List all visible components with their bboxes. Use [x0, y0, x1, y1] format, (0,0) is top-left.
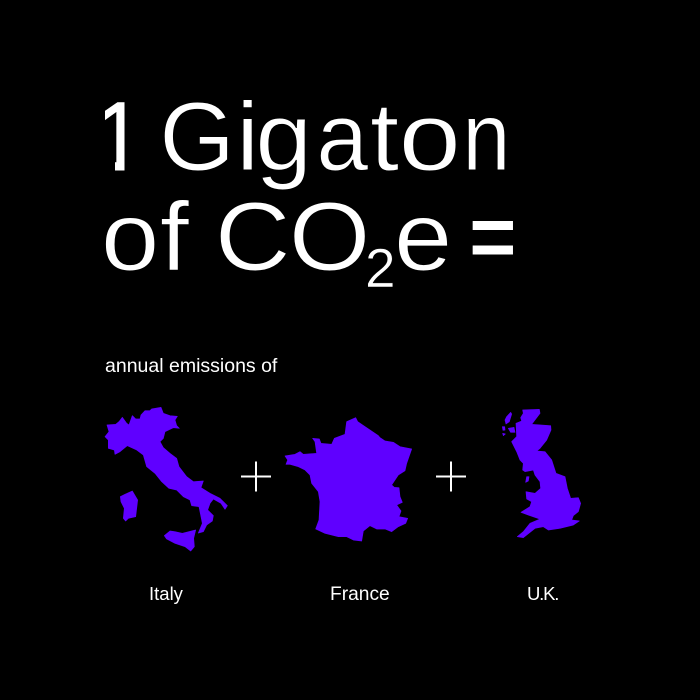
title: n: [462, 83, 510, 191]
label: France: France: [330, 584, 390, 605]
title: o: [399, 83, 461, 191]
plus sign between Italy and France: [241, 462, 271, 492]
title: G: [159, 82, 235, 191]
title: g: [255, 83, 312, 191]
title: [105, 100, 513, 287]
label: Italy: Italy: [149, 583, 184, 604]
subtitle: annual emissions of: annual emissions of: [105, 355, 278, 377]
title: a: [316, 83, 368, 191]
title: t: [370, 84, 399, 191]
title: 1: [92, 82, 146, 191]
plus sign between France and U.K.: [436, 462, 466, 492]
title: =: [470, 183, 516, 291]
title: 2: [365, 237, 396, 299]
map: Italy: [105, 407, 227, 551]
title: ofCO: [101, 184, 370, 291]
label: U.K.: U.K.: [527, 583, 558, 604]
map: U.K.: [502, 409, 581, 538]
map: France: [285, 418, 412, 541]
title: e: [394, 184, 452, 291]
title: i: [236, 84, 259, 191]
